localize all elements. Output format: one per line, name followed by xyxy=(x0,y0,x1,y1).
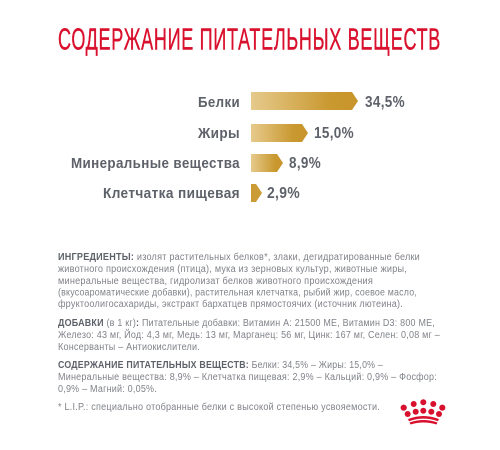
text block: ingredients: (вкусоароматические добавки), растительная клетчатка, рыбий жир, соевое масло, xyxy=(58,286,417,298)
text block: nutrient content: Минеральные вещества: 8,9% – Клетчатка пищевая: 2,9% – Кальций: 0,9% – Фосфор: xyxy=(58,371,437,383)
row: fibre xyxy=(103,184,300,202)
text block: ingredients: фруктоолигосахариды, экстракт бархатцев прямостоячих (источник лютеина). xyxy=(58,298,403,310)
row: fats: 15,0% xyxy=(314,125,354,142)
text block: additives xyxy=(58,317,440,353)
text block: ingredients xyxy=(58,251,420,310)
row: proteins: 34,5% xyxy=(365,94,405,111)
row: minerals xyxy=(71,154,321,172)
row: proteins: Белки xyxy=(198,95,240,111)
text block: additives: ДОБАВКИ (в 1 кг): Питательные добавки: Витамин А: 21500 МЕ, Витамин D3: 800 МЕ, xyxy=(58,317,435,329)
row: proteins xyxy=(198,92,405,111)
row: fats: Жиры xyxy=(197,126,240,142)
row: fats xyxy=(197,124,354,142)
icon: royal canin crown logo xyxy=(401,399,445,424)
row: minerals: 8,9% xyxy=(289,155,321,172)
text block: additives: Консерванты – Антиокислители. xyxy=(58,342,200,353)
bar chart xyxy=(71,92,405,202)
row: fibre: 2,9% xyxy=(267,185,300,202)
text block: nutrient content: 0,9% – Магний: 0,05%. xyxy=(58,384,157,395)
text block: ingredients: животного происхождения (птица), мука из зерновых культур, животные жиры, xyxy=(58,264,407,275)
text block: nutrient content xyxy=(58,360,437,395)
row: minerals: Минеральные вещества xyxy=(71,156,240,172)
text block: additives: Железо: 43 мг, Йод: 4,3 мг, Медь: 13 мг, Марганец: 56 мг, Цинк: 167 мг, Селен: 0,08 мг – xyxy=(58,328,440,341)
footnote: * L.I.P.: специально отобранные белки с высокой степенью усвояемости. xyxy=(58,401,380,413)
row: fibre: Клетчатка пищевая xyxy=(103,186,240,202)
text block: ingredients: ИНГРЕДИЕНТЫ: изолят растительных белков*, злаки, дегидратированные белки xyxy=(58,251,420,263)
text block: ingredients: минеральные вещества, гидролизат белков животного происхождения xyxy=(58,275,373,287)
text block: nutrient content: СОДЕРЖАНИЕ ПИТАТЕЛЬНЫХ ВЕЩЕСТВ: Белки: 34,5% – Жиры: 15,0% – xyxy=(58,360,383,371)
